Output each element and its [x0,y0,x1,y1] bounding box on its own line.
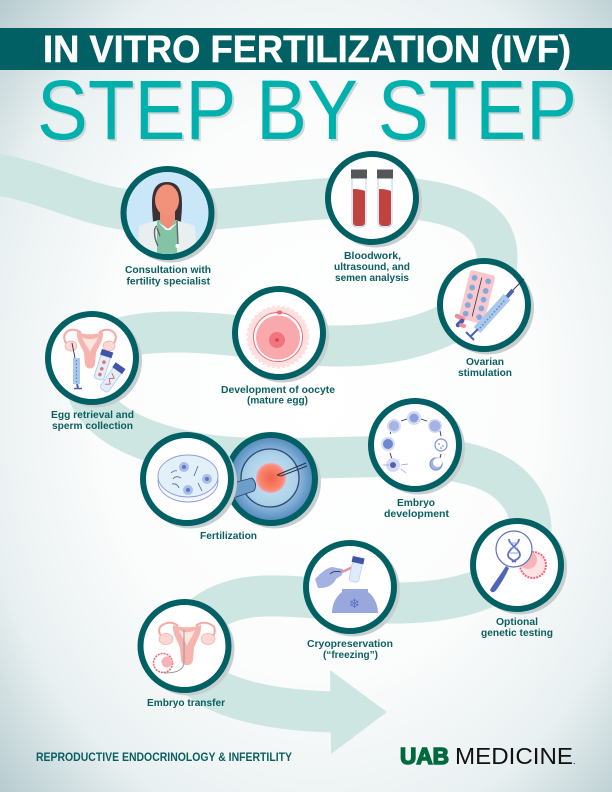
logo: UAB Medicine [400,743,576,769]
logo: UAB Medicine: . [573,756,576,766]
label: genetic testing [481,628,553,639]
icon: magnifier with dna [490,531,532,592]
label [384,498,450,520]
icon: syringe [466,279,524,340]
panel: consultation [124,169,218,288]
panel: oocyte [221,289,335,406]
label [307,639,393,661]
panel: genetic testing [473,521,567,639]
icon: gloved hand with vial [315,556,365,588]
icon: sperm and egg tubes [93,349,126,394]
label: stimulation [458,368,512,379]
icon: microscope view of egg [227,435,321,528]
label: Cryopreservation [307,639,393,650]
label [334,251,410,284]
logo: UAB Medicine: UAB [400,743,449,769]
panel: bloodwork [328,154,422,284]
label [221,385,335,406]
label: Ovarian [466,357,504,368]
winding path arrow [0,172,531,754]
icon: embryo stages [381,411,447,473]
icon: petri dish [143,435,237,528]
icon: blood tubes [351,170,393,227]
label [125,265,211,288]
label: semen analysis [335,273,409,284]
label [458,357,512,379]
label: Fertilization [200,531,257,542]
icon: cell [519,551,546,578]
panel: egg retrieval [48,314,142,432]
label: Development of oocyte [221,385,335,396]
label: Optional [496,617,538,628]
panel: embryo transfer [140,602,234,709]
panel: cryopreservation [306,543,400,661]
logo: UAB Medicine: MEDICINE [455,743,573,769]
panel: fertilization [143,435,321,542]
label: Embryo [397,498,435,509]
label: Consultation with [125,265,211,276]
icon: oocyte [248,307,308,367]
icon: syringe [72,343,82,388]
icon: pills [457,316,464,326]
icon: blister pack [458,270,496,324]
label: Embryo transfer [147,698,225,709]
label: ultrasound, and [334,262,410,273]
icon: cryo tank: ❄ [349,596,360,611]
icon: uterus and catheter [159,623,215,673]
footer department name: REPRODUCTIVE ENDOCRINOLOGY & INFERTILITY [36,752,292,764]
label: Bloodwork, [344,251,401,262]
label: (“freezing”) [323,650,378,661]
label: sperm collection [52,421,133,432]
icon: uterus [64,330,116,368]
label: (mature egg) [247,396,308,406]
label [481,617,553,639]
icon: embryo cell [154,654,172,672]
title band: IN VITRO FERTILIZATION (IVF) [43,29,571,71]
panel: ovarian stimulation [440,261,534,379]
panel: embryo development [371,401,465,520]
label: Egg retrieval and [51,410,134,421]
icon: doctor [138,182,197,256]
label [51,410,134,432]
label: fertility specialist [126,276,211,288]
label: development [384,509,450,520]
